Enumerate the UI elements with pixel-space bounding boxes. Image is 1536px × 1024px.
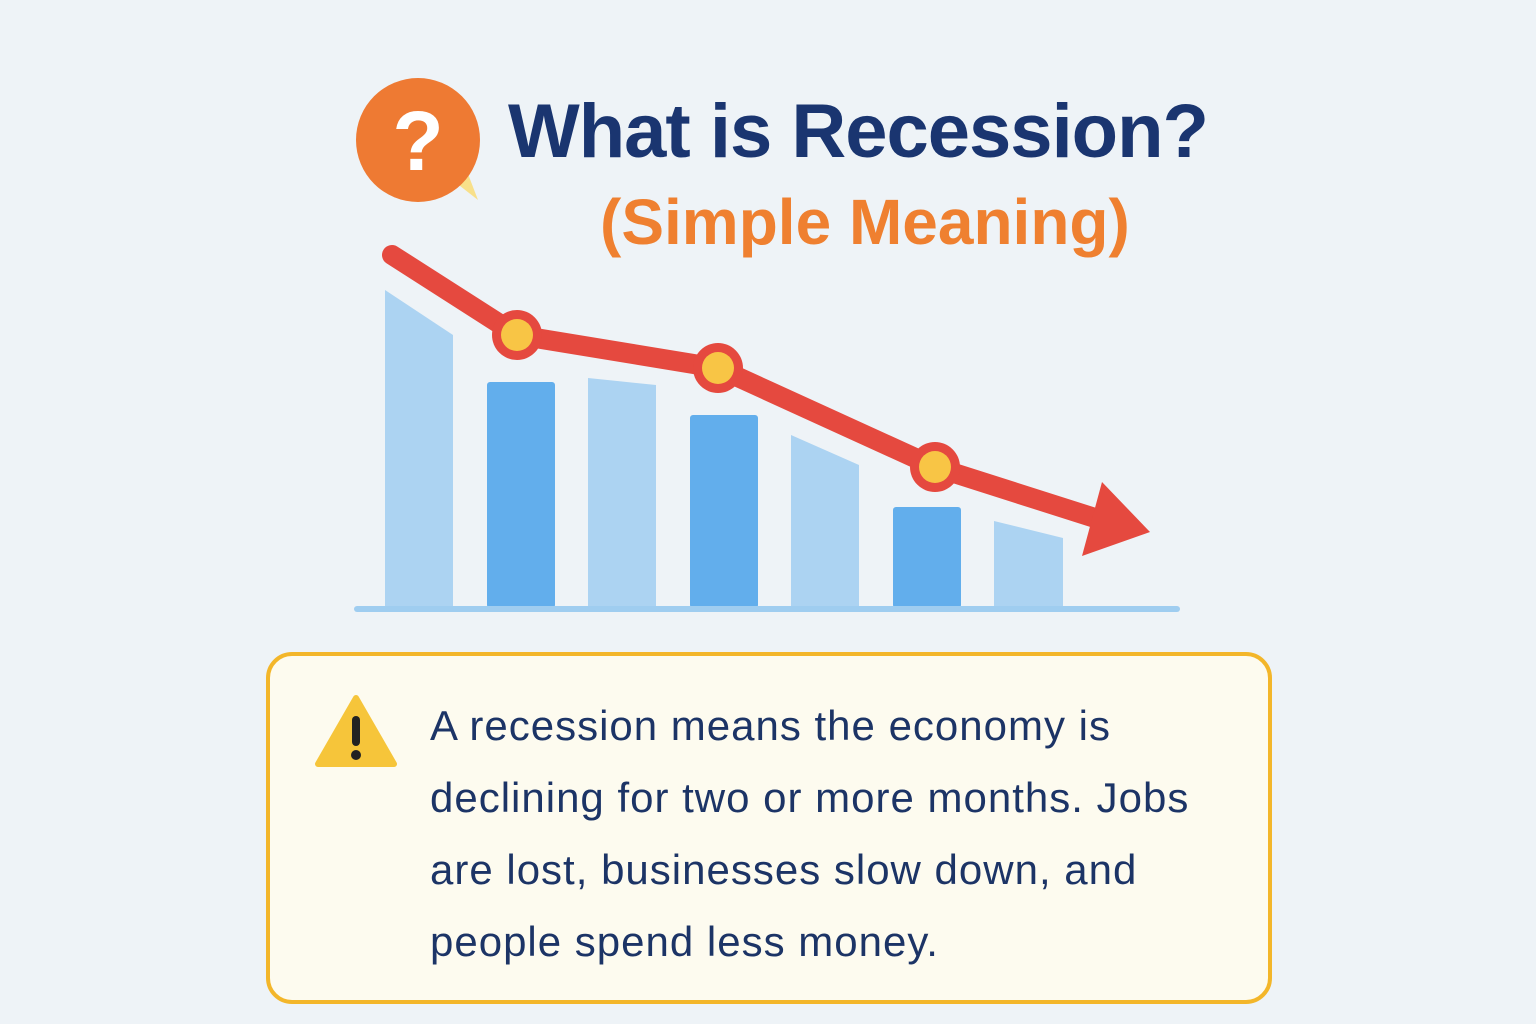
definition text: A recession means the economy is <box>430 702 1111 749</box>
definition text: declining for two or more months. Jobs <box>430 774 1189 821</box>
title: What is Recession? <box>508 89 1208 174</box>
definition text: are lost, businesses slow down, and <box>430 846 1137 893</box>
definition text <box>430 702 1189 965</box>
callout: definition <box>266 652 1272 1004</box>
icon: warning triangle <box>315 695 397 767</box>
trend arrow <box>392 255 1150 556</box>
icon: question mark: ? <box>392 94 444 188</box>
definition text: people spend less money. <box>430 918 939 965</box>
subtitle: (Simple Meaning) <box>600 186 1130 258</box>
icon: question mark <box>356 78 480 202</box>
chart: declining bars with trend arrow <box>354 245 1180 612</box>
